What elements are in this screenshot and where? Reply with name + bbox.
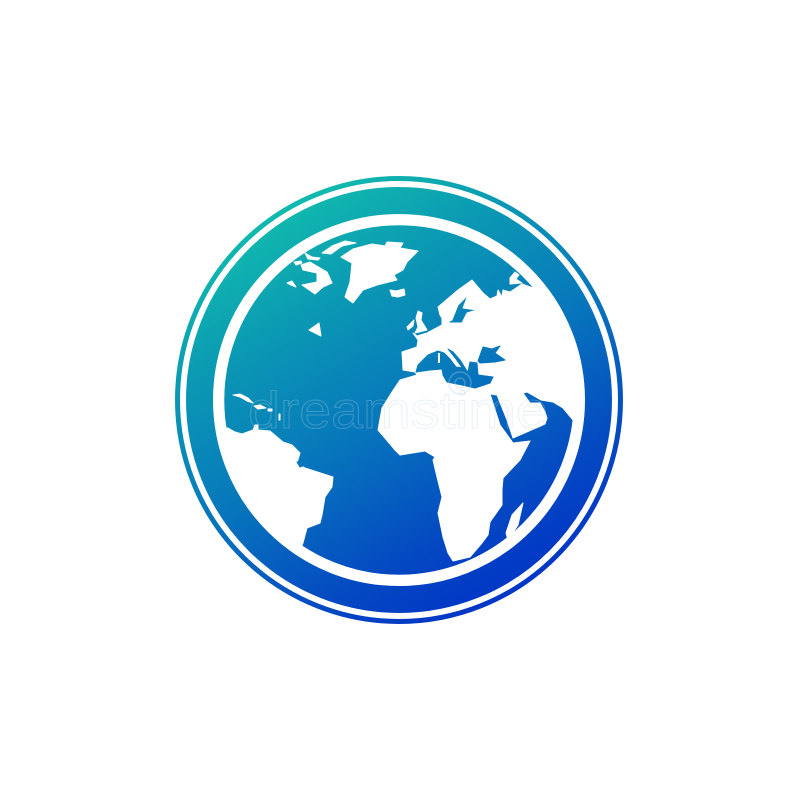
Iceland: [390, 289, 405, 297]
Novaya Zemlya: [510, 272, 522, 284]
globe ocean disc: [224, 225, 574, 575]
Black Sea: [478, 346, 505, 363]
Newfoundland: [309, 323, 321, 336]
watermark spiral: [449, 372, 471, 394]
icon: globe badge: [175, 176, 623, 624]
Europe Asia and Africa: [378, 280, 574, 562]
Canadian Arctic islands: [287, 241, 356, 294]
thick gradient band: [200, 200, 598, 600]
Mediterranean islands: [438, 353, 440, 363]
Adriatic Sea: [448, 349, 467, 371]
continents: [226, 240, 574, 562]
watermark: [248, 372, 548, 440]
outer thin ring: [178, 178, 620, 622]
watermark wordmark: dreamstime: [248, 382, 548, 440]
Great Britain and Ireland: [407, 311, 427, 333]
Amazon mouth: [297, 461, 305, 467]
South America: [226, 424, 334, 546]
inland seas: [297, 346, 505, 467]
Madagascar: [506, 503, 523, 540]
Mediterranean Sea: [416, 351, 493, 388]
Greenland: [341, 242, 418, 303]
Caribbean islands: [233, 394, 280, 420]
white ring around globe: [219, 220, 579, 580]
